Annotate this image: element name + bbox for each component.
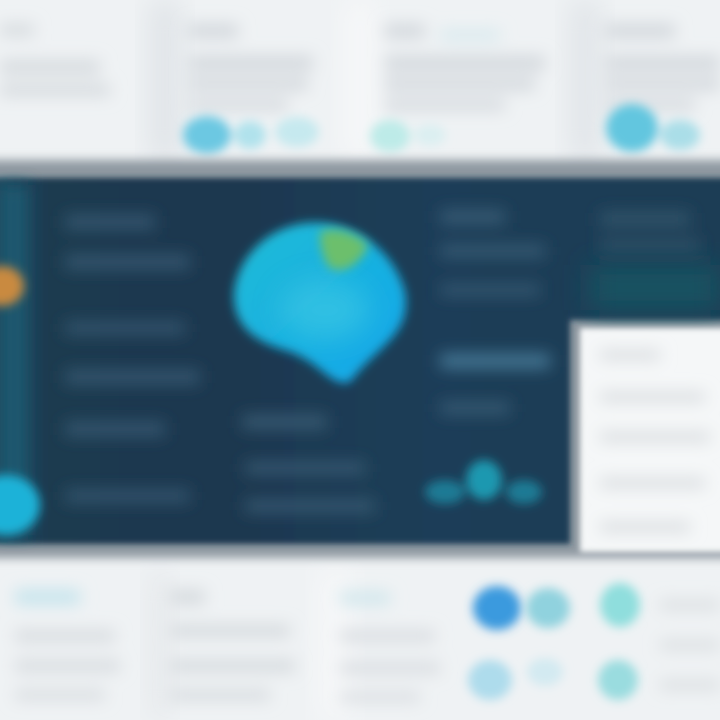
panel: bottom row cards (15, 583, 720, 702)
top card 1 text (0, 24, 110, 96)
bottom blue icons (468, 586, 570, 700)
panel: top row cards (0, 24, 720, 154)
top row cyan icons (183, 104, 700, 154)
dashboard body (0, 178, 720, 544)
globe highlight (280, 280, 370, 340)
bottom teal icons (598, 583, 640, 700)
globe body (234, 223, 406, 383)
right teal glow (590, 265, 720, 310)
panel: white side card (580, 328, 720, 552)
top card 3 text (385, 24, 545, 110)
icon: cyan corner blob (0, 475, 40, 535)
globe chart (234, 223, 406, 383)
left strip (0, 185, 28, 535)
mini chart (425, 460, 542, 504)
panel: dark central dashboard (0, 160, 720, 558)
icon: orange marker (0, 266, 24, 306)
top card 4 text (605, 24, 720, 110)
left column text (65, 215, 200, 502)
bottom card 3 text (340, 592, 440, 702)
bottom card 1 text (15, 590, 120, 700)
bottom card 2 text (170, 590, 295, 700)
dashboard shadow (0, 160, 720, 558)
bottom right text (660, 600, 720, 690)
top card 2 text (188, 24, 313, 110)
side card text (600, 350, 710, 532)
centre label text (242, 415, 375, 512)
right column text (440, 210, 550, 414)
top-right tile text (600, 212, 700, 250)
green segment (320, 230, 368, 270)
